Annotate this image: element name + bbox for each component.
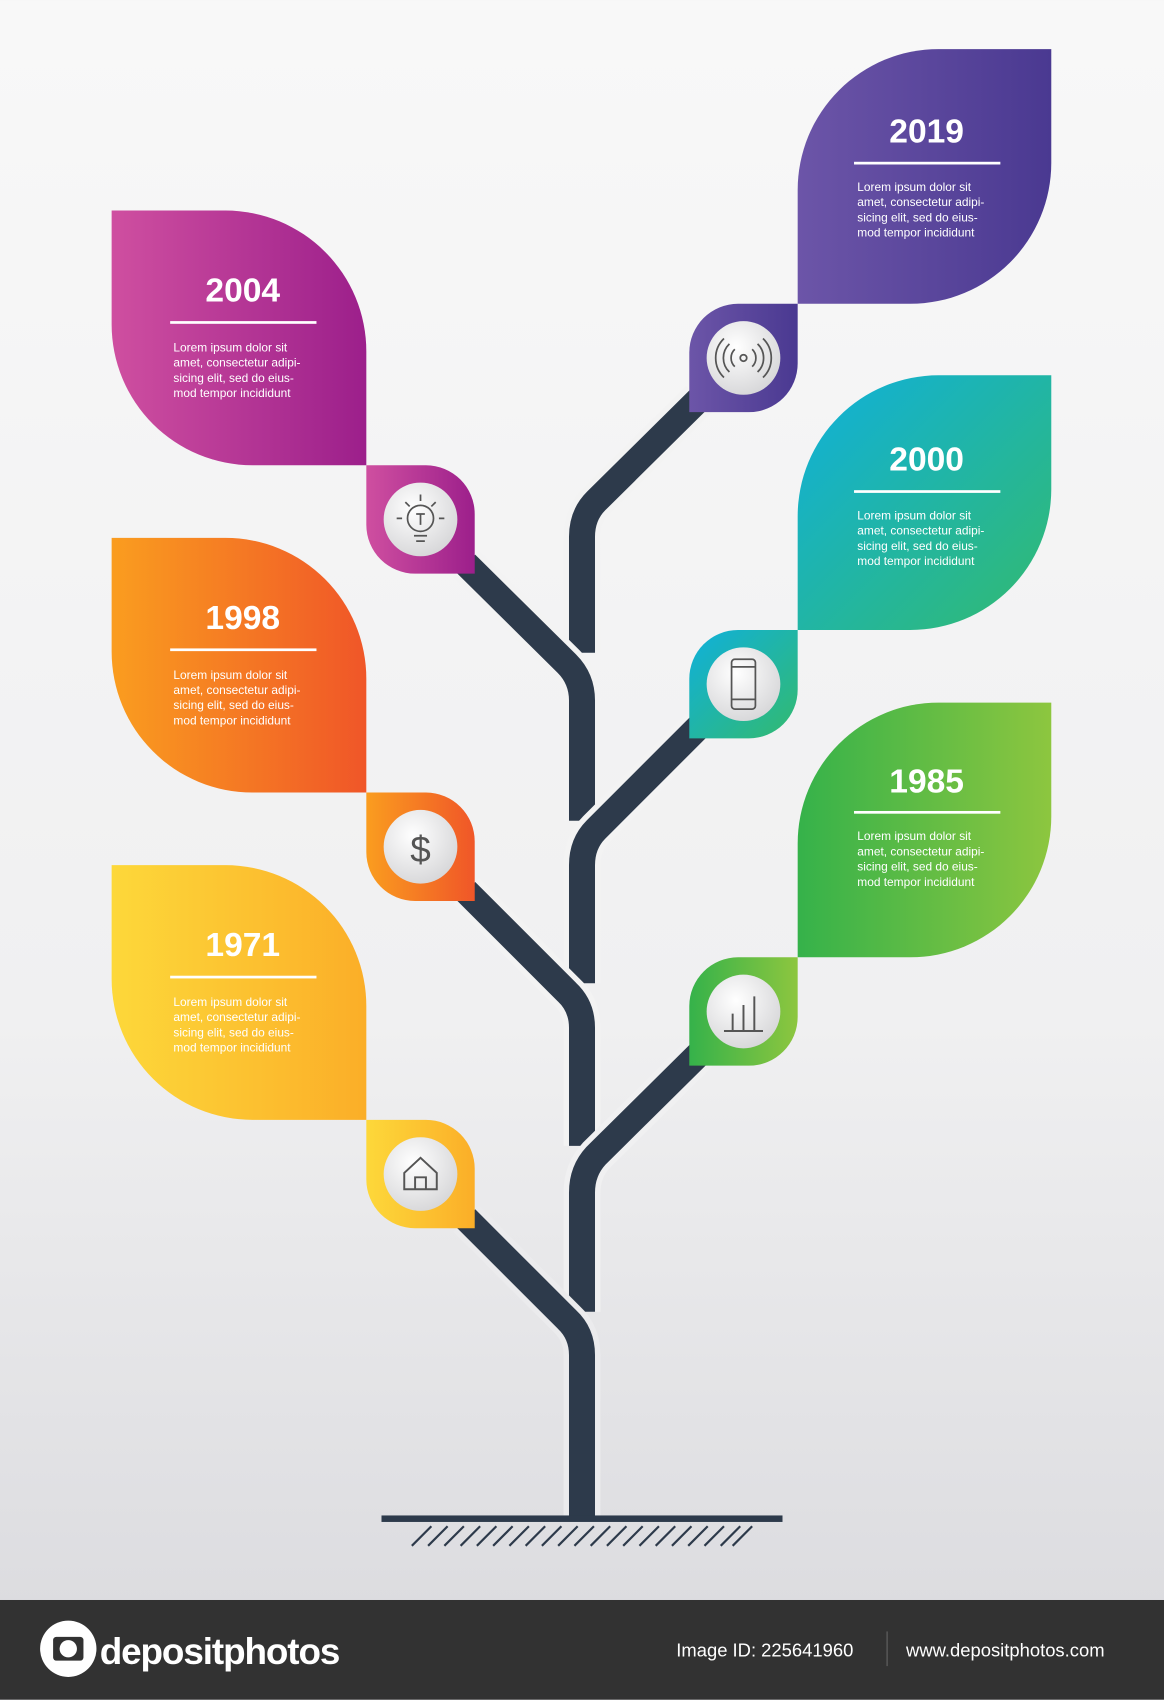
footer: Image ID: 225641960 (676, 1639, 853, 1660)
leaf: 2019: 2019 (889, 113, 964, 150)
leaf: 1985: 1985 (889, 764, 964, 801)
leaf: 2019: Lorem ipsum dolor sit (857, 180, 972, 194)
footer: depositphotos (100, 1631, 339, 1672)
leaf: 2004: mod tempor incididunt (173, 386, 291, 400)
leaf: 1971: mod tempor incididunt (173, 1041, 291, 1055)
node: dollar: $ (410, 829, 431, 870)
node: wireless (689, 304, 798, 412)
tree trunk and branches (466, 399, 699, 1518)
leaf: 2000: amet, consectetur adipi- (857, 524, 984, 538)
leaf: 1985: sicing elit, sed do eius- (857, 860, 978, 874)
leaf: 2004: amet, consectetur adipi- (173, 356, 301, 370)
leaf: 1985 (798, 703, 1051, 957)
leaf: 1998: sicing elit, sed do eius- (173, 698, 294, 712)
node: lightbulb (366, 465, 475, 574)
leaf: 1998: amet, consectetur adipi- (173, 683, 301, 697)
leaf: 1998: 1998 (205, 600, 280, 637)
leaf: 2004: Lorem ipsum dolor sit (173, 340, 288, 354)
leaf: 1971: Lorem ipsum dolor sit (173, 995, 288, 1009)
leaf: 2000: Lorem ipsum dolor sit (857, 508, 972, 522)
leaf: 1985: Lorem ipsum dolor sit (857, 829, 972, 843)
leaf: 2019 (798, 49, 1051, 304)
leaf: 1971: sicing elit, sed do eius- (173, 1025, 294, 1039)
leaf: 1998: mod tempor incididunt (173, 713, 291, 727)
leaf: 1971 (112, 865, 366, 1120)
ground (381, 1515, 783, 1546)
leaf: 2004: sicing elit, sed do eius- (173, 371, 294, 385)
leaf: 2004: 2004 (205, 273, 280, 310)
leaf: 1971: 1971 (205, 927, 280, 964)
leaf: 2019: sicing elit, sed do eius- (857, 210, 978, 224)
leaf: 2000: mod tempor incididunt (857, 554, 975, 568)
node: phone (689, 630, 798, 738)
leaf: 1971: amet, consectetur adipi- (173, 1010, 301, 1024)
footer: www.depositphotos.com (905, 1639, 1105, 1660)
node: bar chart (689, 957, 798, 1066)
leaf: 2019: amet, consectetur adipi- (857, 195, 984, 209)
leaf: 2000 (798, 375, 1051, 630)
leaf: 2019: mod tempor incididunt (857, 226, 975, 240)
leaf: 1985: amet, consectetur adipi- (857, 844, 984, 858)
leaf: 2000: sicing elit, sed do eius- (857, 539, 978, 553)
leaf: 2000: 2000 (889, 442, 964, 479)
node: house (366, 1120, 475, 1228)
leaf: 1998: Lorem ipsum dolor sit (173, 668, 288, 682)
leaf: 1985: mod tempor incididunt (857, 875, 975, 889)
footer (0, 1600, 1164, 1700)
node: dollar (366, 793, 475, 901)
leaf: 2004 (112, 211, 366, 465)
leaf: 1998 (112, 538, 366, 793)
